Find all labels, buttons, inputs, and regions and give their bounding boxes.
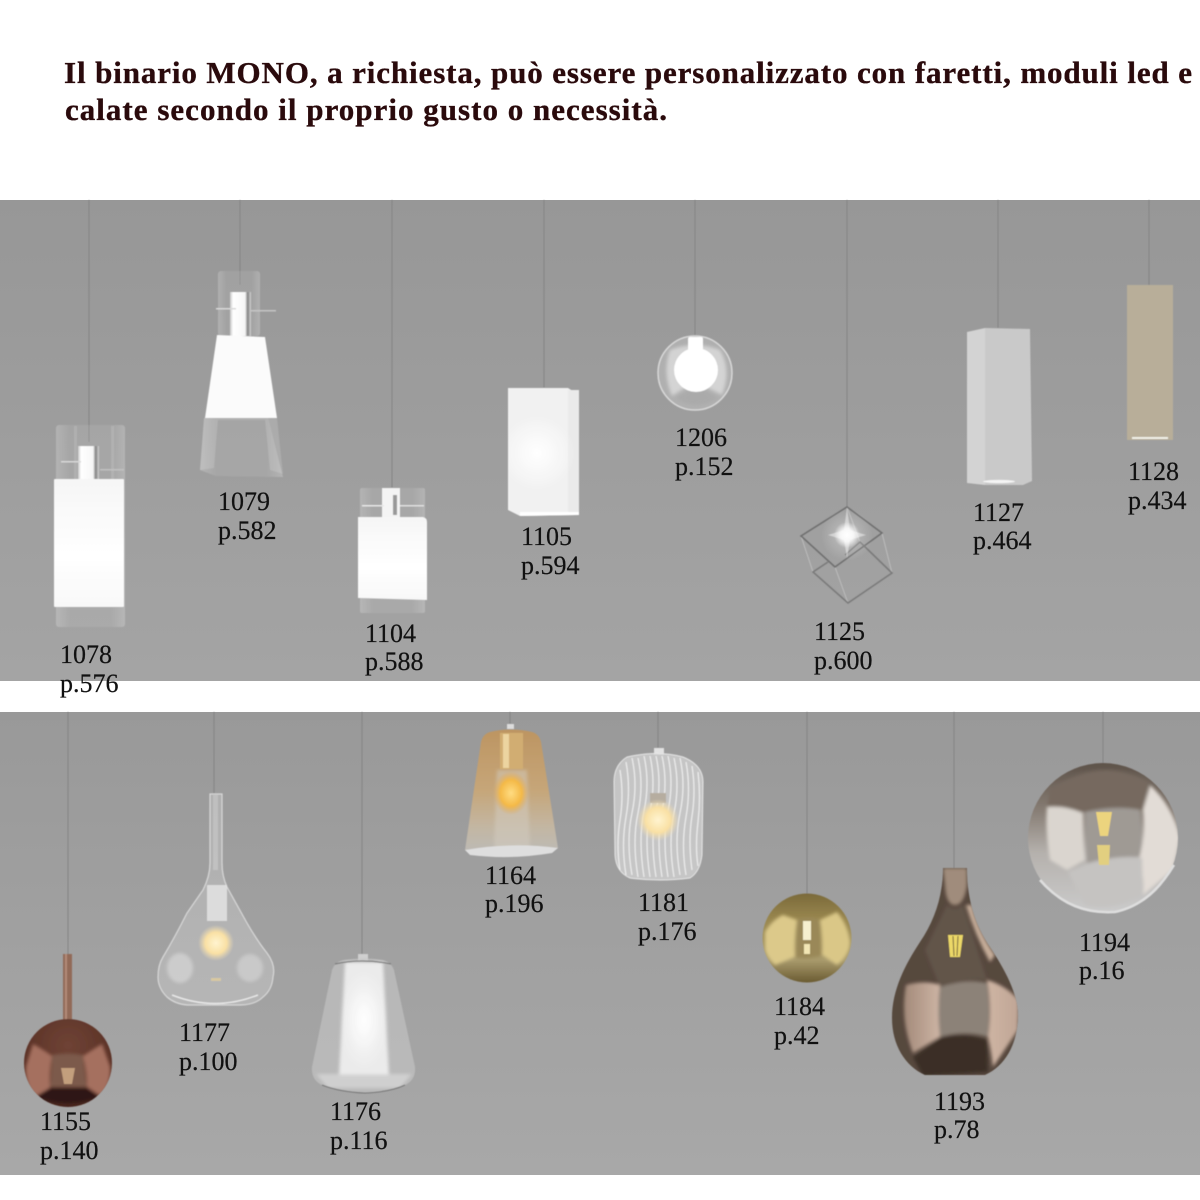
- lamp 1184: [762, 712, 852, 982]
- panel: upper lamps background: [0, 200, 1200, 681]
- label 1127: 1127: [973, 498, 1024, 527]
- label 1104: [365, 619, 424, 676]
- label 1164: 1164: [485, 861, 536, 890]
- label 1155: [40, 1107, 98, 1165]
- label 1127: [973, 498, 1032, 555]
- label 1193: 1193: [934, 1087, 985, 1116]
- label 1181: 1181: [638, 888, 689, 917]
- label 1125: p.600: [814, 646, 872, 675]
- label 1193: [934, 1087, 985, 1144]
- lamp 1176: [312, 712, 415, 1094]
- label 1079: 1079: [218, 487, 270, 516]
- lamp 1125: [801, 200, 892, 603]
- lamp 1181: [614, 712, 703, 880]
- lamp 1104: [358, 200, 427, 613]
- label 1155: 1155: [40, 1107, 91, 1136]
- label 1184: p.42: [774, 1021, 820, 1050]
- lamp 1164: [465, 712, 558, 857]
- label 1177: p.100: [179, 1047, 238, 1076]
- lamp 1078: [54, 200, 125, 627]
- label 1078: p.576: [60, 669, 118, 698]
- label 1079: p.582: [218, 516, 276, 545]
- label 1177: [179, 1018, 238, 1076]
- label 1125: 1125: [814, 617, 865, 646]
- label 1194: 1194: [1079, 928, 1130, 957]
- label 1105: 1105: [521, 522, 572, 551]
- label 1181: p.176: [638, 917, 696, 946]
- lamp 1155: [24, 712, 112, 1107]
- label 1104: p.588: [365, 647, 424, 676]
- lamp 1193: [892, 712, 1019, 1076]
- label 1177: 1177: [179, 1018, 230, 1047]
- panel: lower lamps background: [0, 712, 1200, 1175]
- label 1128: 1128: [1128, 457, 1179, 486]
- label 1105: [521, 522, 580, 580]
- label 1176: [330, 1097, 388, 1155]
- lamp 1127: [967, 200, 1032, 485]
- label 1125: [814, 617, 872, 675]
- title: [64, 55, 1192, 127]
- label 1078: 1078: [60, 640, 112, 669]
- title: calate secondo il proprio gusto o necessità.: [65, 92, 667, 127]
- label 1176: p.116: [330, 1126, 388, 1155]
- label 1184: [774, 992, 825, 1050]
- label 1164: p.196: [485, 889, 544, 918]
- label 1164: [485, 861, 544, 918]
- label 1079: [218, 487, 276, 545]
- label 1078: [60, 640, 118, 698]
- label 1104: 1104: [365, 619, 416, 648]
- label 1206: p.152: [675, 452, 734, 481]
- label 1128: p.434: [1128, 486, 1186, 515]
- lamp 1206: [658, 200, 732, 410]
- label 1176: 1176: [330, 1097, 381, 1126]
- label 1194: [1079, 928, 1130, 985]
- lamp 1105: [499, 200, 579, 516]
- label 1128: [1128, 457, 1186, 515]
- lamp 1128: [1127, 200, 1173, 440]
- label 1206: 1206: [675, 423, 727, 452]
- label 1206: [675, 423, 734, 481]
- label 1105: p.594: [521, 551, 580, 580]
- label 1184: 1184: [774, 992, 825, 1021]
- label 1155: p.140: [40, 1136, 98, 1165]
- lamp 1079: [200, 200, 283, 477]
- lamp 1194: [1028, 712, 1180, 913]
- label 1194: p.16: [1079, 956, 1124, 985]
- lamp 1177: [158, 712, 274, 1005]
- label 1181: [638, 888, 696, 946]
- label 1127: p.464: [973, 526, 1032, 555]
- title: Il binario MONO, a richiesta, può essere personalizzato con faretti, moduli led e: [64, 55, 1192, 90]
- label 1193: p.78: [934, 1115, 980, 1144]
